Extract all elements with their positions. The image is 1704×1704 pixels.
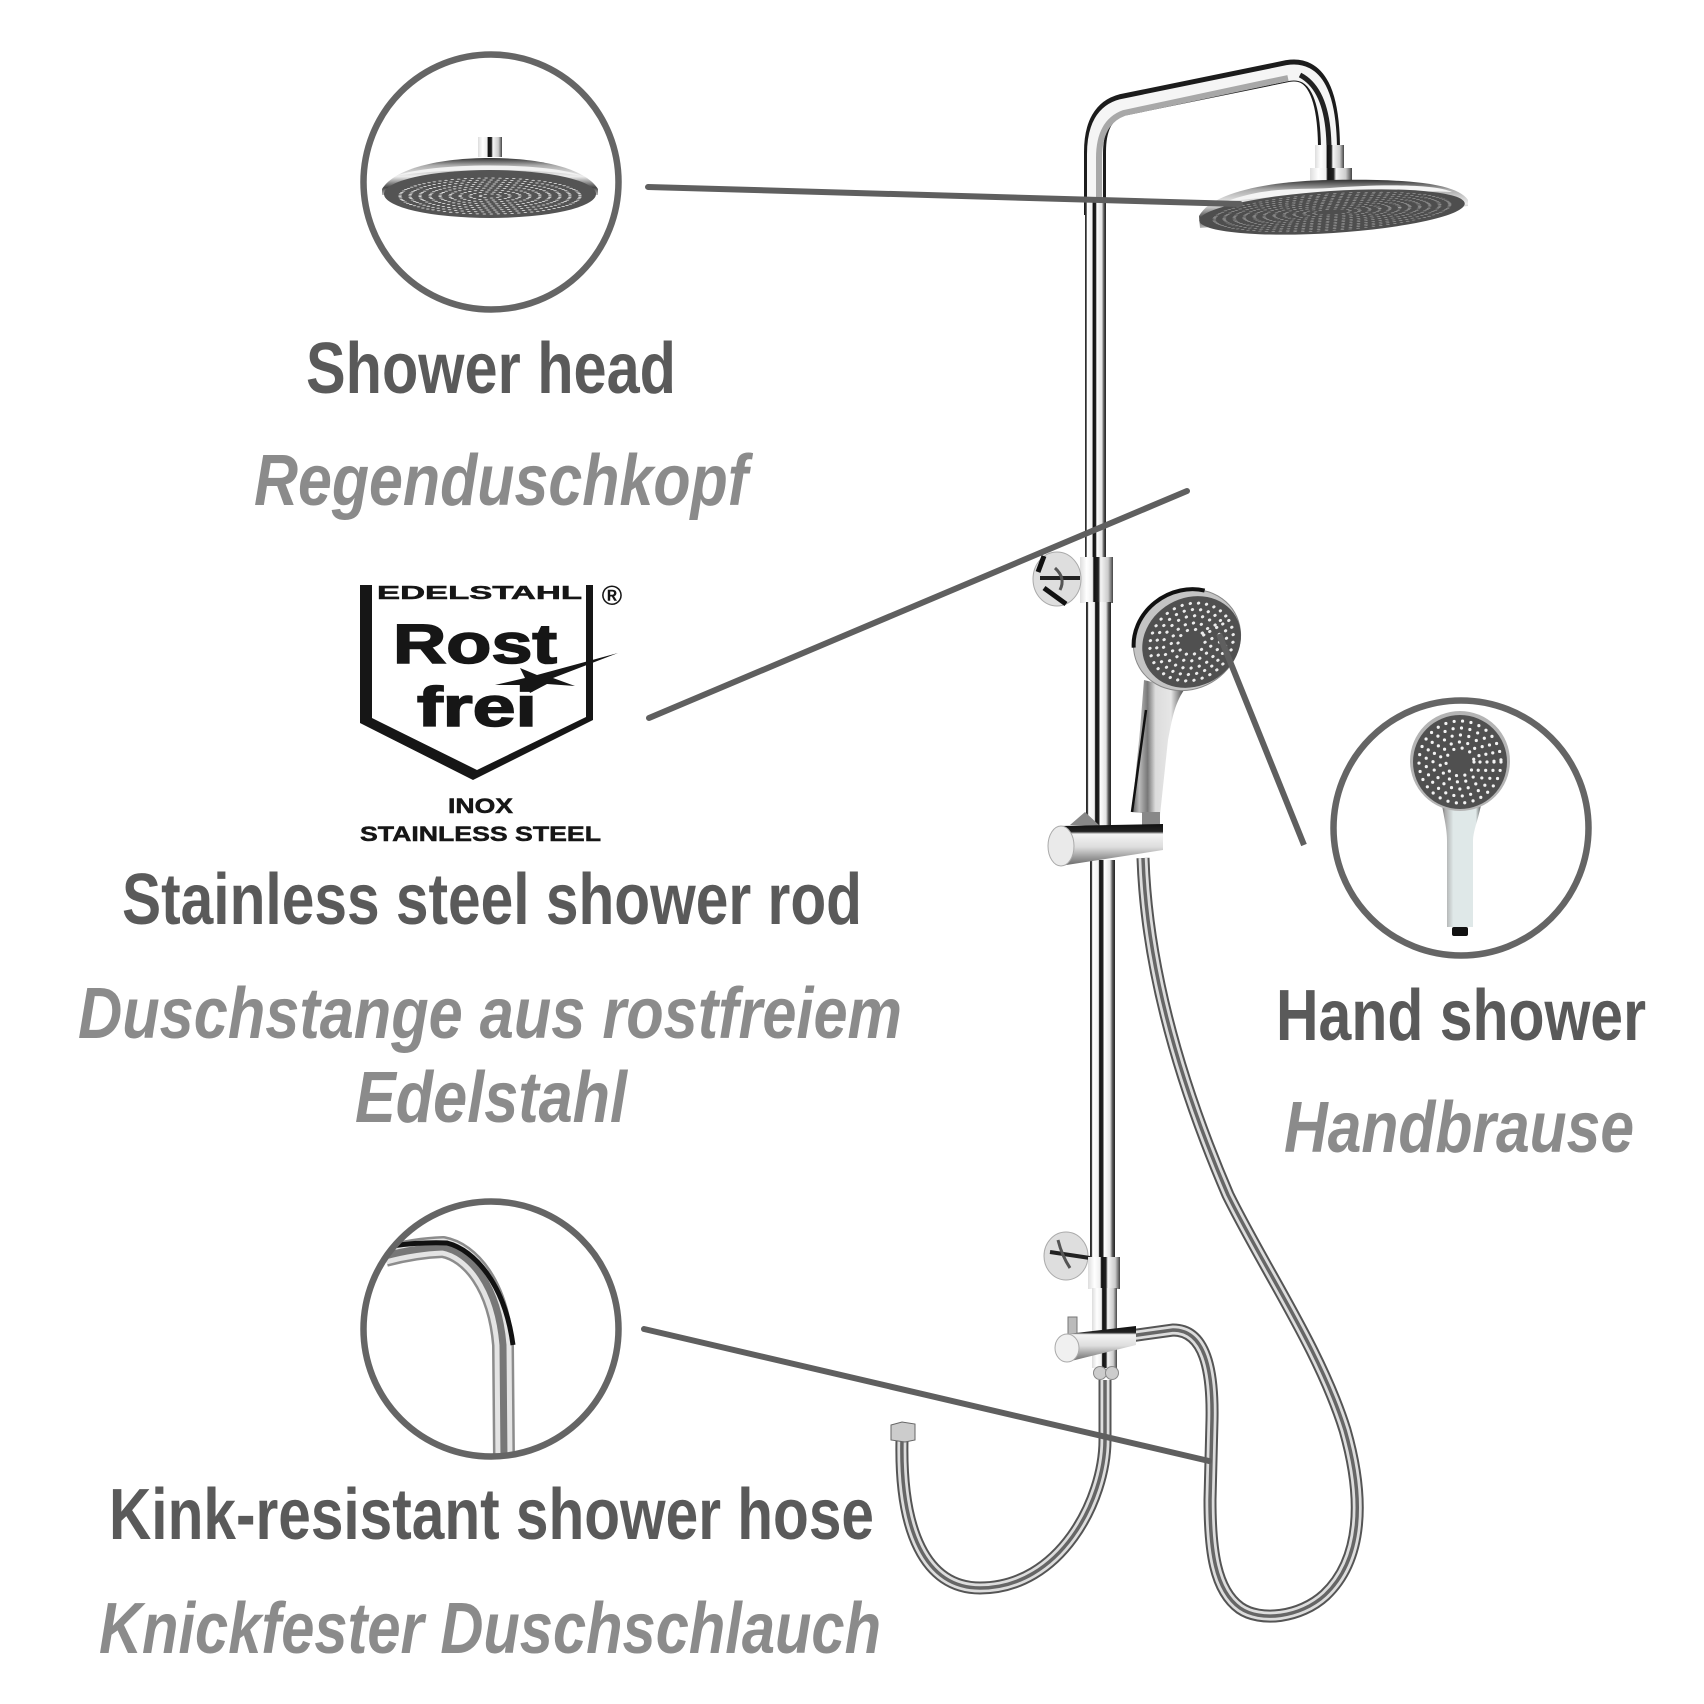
diverter	[1055, 1317, 1136, 1380]
subheading line 2: Edelstahl	[355, 1058, 629, 1138]
circle badge: shower hose	[364, 1202, 618, 1460]
circle badge: shower head	[364, 54, 618, 310]
shower arm	[1095, 70, 1329, 217]
logo: Edelstahl Rostfrei: EDELSTAHL	[377, 583, 582, 603]
lower wall bracket	[1044, 1232, 1090, 1280]
logo: Edelstahl Rostfrei: STAINLESS STEEL	[360, 823, 601, 846]
logo: Edelstahl Rostfrei: Rost	[393, 612, 557, 675]
upper rod	[1085, 200, 1106, 560]
callout line: shower head	[648, 187, 1240, 204]
logo: Edelstahl Rostfrei	[360, 580, 623, 846]
upper wall bracket	[1033, 552, 1081, 606]
callout line: hand shower	[1219, 634, 1304, 845]
diverter stem	[1092, 1288, 1117, 1368]
lower rod	[1090, 860, 1115, 1260]
lower collar	[1088, 1257, 1120, 1289]
shower system illustration	[891, 70, 1468, 1616]
subheading line 1: Duschstange aus rostfreiem	[78, 974, 902, 1054]
subheading: Knickfester Duschschlauch: Knickfester Duschschlauch	[99, 1589, 881, 1669]
middle rod	[1086, 602, 1111, 830]
heading: shower head: Shower head	[306, 329, 676, 409]
upper collar	[1080, 557, 1113, 603]
hose end nut	[891, 1422, 915, 1442]
rain shower head	[1198, 180, 1468, 242]
logo: Edelstahl Rostfrei: INOX	[448, 795, 513, 818]
hand shower	[1115, 570, 1259, 826]
panel: shower hose	[99, 1202, 881, 1669]
subheading: Regenduschkopf: Regenduschkopf	[254, 441, 753, 521]
heading: stainless steel shower rod: Stainless steel shower rod	[122, 860, 862, 940]
callout line: shower rod	[649, 491, 1187, 718]
shower head collar	[1310, 145, 1352, 182]
callout line: shower hose	[644, 1329, 1209, 1461]
wall hose	[902, 1380, 1105, 1588]
panel: hand shower	[1276, 700, 1646, 1168]
logo: Edelstahl Rostfrei: ®	[602, 580, 623, 611]
subheading: Handbrause: Handbrause	[1284, 1088, 1634, 1168]
rod slider	[1048, 812, 1163, 866]
circle badge: hand shower	[1334, 700, 1588, 956]
panel: shower head	[254, 54, 753, 521]
hand shower hose	[1130, 858, 1357, 1616]
heading: kink-resistant shower hose: Kink-resistant shower hose	[109, 1475, 874, 1555]
panel: stainless steel rod	[78, 580, 902, 1138]
logo: Edelstahl Rostfrei: frei	[417, 675, 537, 738]
